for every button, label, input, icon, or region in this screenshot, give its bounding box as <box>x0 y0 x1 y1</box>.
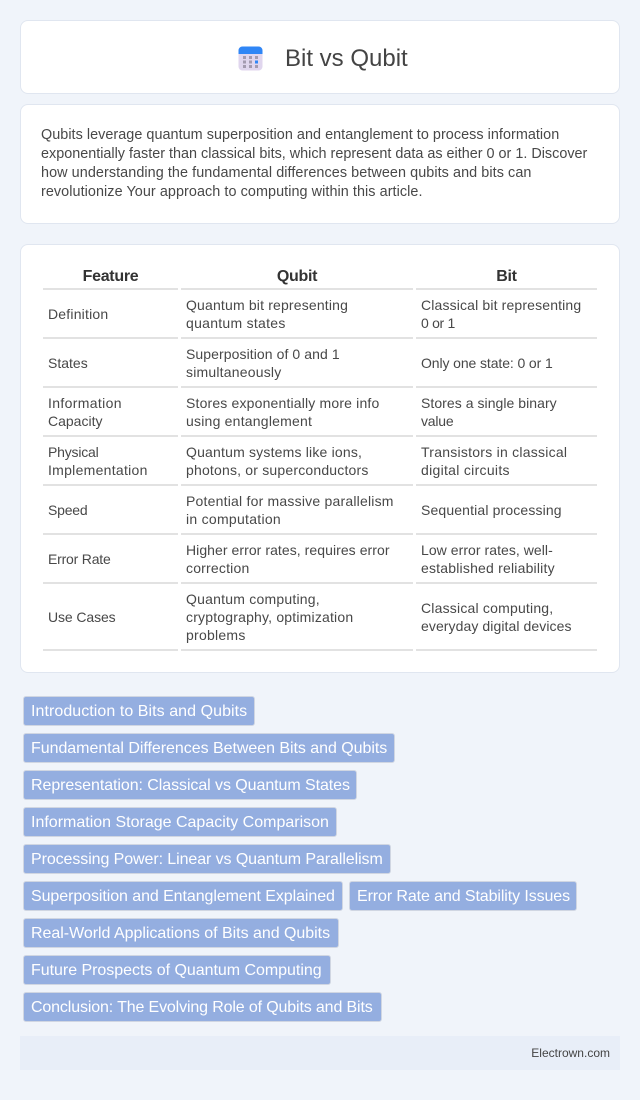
row: Use Cases: Classical computing, <box>421 600 553 616</box>
topic chips <box>23 696 577 1022</box>
chip <box>23 807 337 837</box>
chip <box>23 992 382 1022</box>
row: Use Cases: Use Cases <box>48 609 116 625</box>
row: States: Superposition of 0 and 1 <box>186 346 340 362</box>
header panel <box>20 20 620 94</box>
row: Information Capacity <box>43 395 597 437</box>
intro text panel <box>20 104 620 224</box>
row: Definition: 0 or 1 <box>421 315 455 331</box>
comparison table <box>43 268 597 651</box>
row: States <box>43 346 597 388</box>
row: Information Capacity: Stores a single binary <box>421 395 557 411</box>
row: Use Cases: problems <box>186 627 246 643</box>
row: Definition <box>43 297 597 339</box>
row: Error Rate: Low error rates, well- <box>421 542 553 558</box>
chip: Real-World Applications of Bits and Qubits <box>31 925 330 942</box>
row: Speed: in computation <box>186 511 281 527</box>
chip: Information Storage Capacity Comparison <box>31 814 329 831</box>
chip <box>23 696 255 726</box>
row: Definition: Quantum bit representing <box>186 297 348 313</box>
chip: Conclusion: The Evolving Role of Qubits and Bits <box>31 999 373 1016</box>
intro paragraph: exponentially faster than classical bits, which represent data as either 0 or 1. Discover <box>41 146 587 162</box>
comparison table panel <box>20 244 620 673</box>
row: Physical Implementation: Quantum systems like ions, <box>186 444 362 460</box>
row: Physical Implementation: Transistors in classical <box>421 444 567 460</box>
row: Error Rate: Error Rate <box>48 551 111 567</box>
row: Speed: Sequential processing <box>421 502 562 518</box>
chip <box>349 881 577 911</box>
table header row: Qubit <box>277 268 317 285</box>
intro paragraph: revolutionize Your approach to computing within this article. <box>41 184 423 200</box>
chip: Fundamental Differences Between Bits and Qubits <box>31 740 387 757</box>
title: Bit vs Qubit <box>285 45 408 72</box>
row: Definition: quantum states <box>186 315 286 331</box>
row: States: States <box>48 355 88 371</box>
row: Use Cases: everyday digital devices <box>421 618 572 634</box>
chip: Error Rate and Stability Issues <box>357 888 570 905</box>
chip <box>23 770 357 800</box>
intro paragraph: Qubits leverage quantum superposition and entanglement to process information <box>41 127 559 143</box>
row: Information Capacity: Stores exponentially more info <box>186 395 379 411</box>
chip: Future Prospects of Quantum Computing <box>31 962 322 979</box>
row: Error Rate: Higher error rates, requires error <box>186 542 390 558</box>
chip: Introduction to Bits and Qubits <box>31 703 247 720</box>
footer <box>20 1036 620 1070</box>
row: Information Capacity: value <box>421 413 453 429</box>
row: Error Rate: established reliability <box>421 560 555 576</box>
row: Information Capacity: Information <box>48 395 122 411</box>
row: Physical Implementation: digital circuits <box>421 462 510 478</box>
row: Definition: Classical bit representing <box>421 297 581 313</box>
row: Use Cases <box>43 591 597 651</box>
row: Error Rate <box>43 542 597 584</box>
chip <box>23 733 395 763</box>
source credit: Electrown.com <box>531 1046 610 1060</box>
icon: calendar grid <box>238 46 262 70</box>
row: Physical Implementation: Implementation <box>48 462 148 478</box>
row: Physical Implementation: Physical <box>48 444 99 460</box>
row: Error Rate: correction <box>186 560 249 576</box>
intro paragraph <box>41 127 588 200</box>
chip <box>23 881 343 911</box>
row: Physical Implementation <box>43 444 597 486</box>
row: Information Capacity: Capacity <box>48 413 102 429</box>
intro paragraph: how understanding the fundamental differences between qubits and bits can <box>41 165 531 181</box>
table header row: Bit <box>496 268 517 285</box>
chip <box>23 918 339 948</box>
row: Use Cases: cryptography, optimization <box>186 609 353 625</box>
row: Speed <box>43 493 597 535</box>
table header row: Feature <box>83 268 138 285</box>
chip <box>23 955 331 985</box>
chip: Representation: Classical vs Quantum States <box>31 777 350 794</box>
row: States: Only one state: 0 or 1 <box>421 355 553 371</box>
row: Physical Implementation: photons, or superconductors <box>186 462 369 478</box>
row: Use Cases: Quantum computing, <box>186 591 320 607</box>
table header row <box>43 268 597 290</box>
row: Speed: Speed <box>48 502 87 518</box>
chip <box>23 844 391 874</box>
row: Definition: Definition <box>48 306 108 322</box>
chip: Superposition and Entanglement Explained <box>31 888 335 905</box>
chip: Processing Power: Linear vs Quantum Parallelism <box>31 851 383 868</box>
row: Information Capacity: using entanglement <box>186 413 312 429</box>
row: Speed: Potential for massive parallelism <box>186 493 394 509</box>
row: States: simultaneously <box>186 364 281 380</box>
